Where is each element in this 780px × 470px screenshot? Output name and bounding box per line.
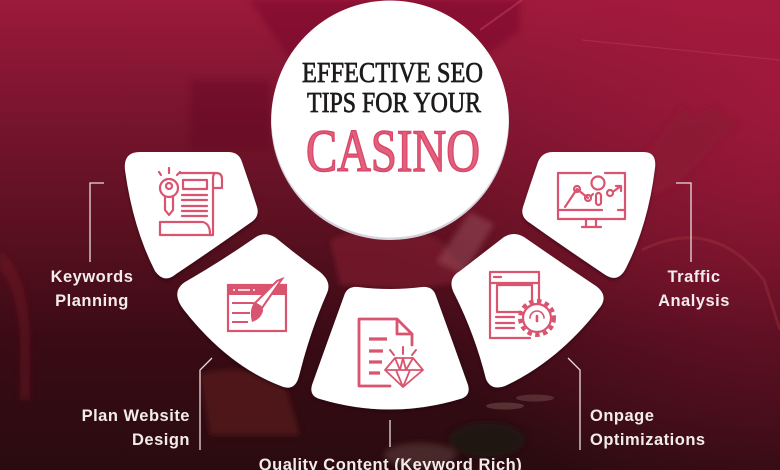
panel: traffic analysis card — [522, 152, 655, 278]
label: plan website design: Plan Website — [82, 407, 190, 425]
icon: web page with speedometer gear — [490, 272, 554, 338]
icon: browser window with paintbrush — [228, 279, 286, 331]
label: keywords planning: Planning — [55, 292, 129, 310]
label: onpage optimizations: Optimizations — [590, 431, 706, 449]
heading: effective SEO tips: EFFECTIVE SEO — [302, 58, 483, 89]
label: keywords planning — [51, 183, 133, 310]
icon: document with diamond — [359, 319, 423, 387]
heading: casino: CASINO — [306, 118, 480, 184]
label: traffic analysis: Traffic — [667, 268, 721, 286]
panel: quality content card — [311, 287, 469, 410]
label: keywords planning: Keywords — [51, 268, 133, 286]
label: plan website design — [82, 358, 212, 450]
label: onpage optimizations — [568, 358, 706, 450]
panel: onpage optimizations card — [451, 234, 604, 387]
label: onpage optimizations: Onpage — [590, 407, 654, 425]
label: traffic analysis — [658, 183, 730, 310]
icon: monitor with analytics chart — [558, 173, 625, 227]
icon: key and document scroll — [159, 168, 222, 235]
panel: plan website design card — [177, 234, 328, 388]
panel: keywords planning card — [125, 152, 258, 278]
label: traffic analysis: Analysis — [658, 292, 730, 310]
panel: title circle — [271, 0, 509, 240]
heading: effective SEO tips — [302, 58, 483, 119]
label: plan website design: Design — [132, 431, 190, 449]
heading: effective SEO tips: TIPS FOR YOUR — [307, 88, 481, 119]
